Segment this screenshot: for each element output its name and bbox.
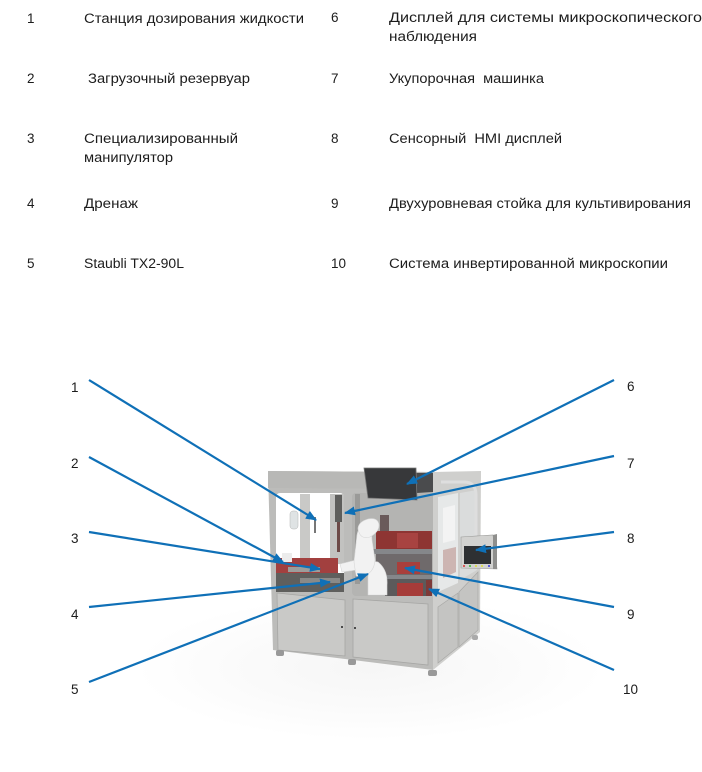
arrow 7 (345, 456, 614, 513)
legend item 8: 8 (331, 131, 339, 146)
legend item 6: наблюдения (389, 29, 477, 44)
legend item 3: 3 (27, 131, 35, 146)
legend item 8: Сенсорный HMI дисплей (389, 131, 562, 146)
arrow 8 (476, 532, 614, 550)
right window (352, 493, 433, 596)
callout numbers: 6 (627, 379, 635, 394)
legend item 10: 10 (331, 256, 346, 271)
callout numbers: 3 (71, 531, 79, 546)
legend item 8 (331, 131, 562, 146)
legend item 3: Специализированный (84, 131, 238, 146)
HMI touch display (461, 534, 497, 569)
legend item 2: Загрузочный резервуар (88, 71, 250, 86)
arrow 4 (89, 582, 330, 607)
callout arrows (89, 380, 614, 682)
legend item 6: Дисплей для системы микроскопического (389, 10, 702, 25)
legend item 1: Станция дозирования жидкости (84, 11, 304, 26)
arrow 2 (89, 457, 283, 562)
right side panel (433, 471, 481, 670)
legend item 3: манипулятор (84, 150, 173, 165)
arrow 5 (89, 574, 368, 682)
legend item 5: 5 (27, 256, 35, 271)
legend item 2 (27, 71, 250, 86)
legend item 10: Система инвертированной микроскопии (389, 256, 668, 271)
arrow 3 (89, 532, 320, 569)
legend item 2: 2 (27, 71, 35, 86)
cabinet doors (277, 593, 345, 656)
callout numbers: 1 (71, 380, 79, 395)
legend item 4 (27, 196, 138, 211)
legend item 4: 4 (27, 196, 35, 211)
callout numbers: 8 (627, 531, 635, 546)
robot arm (340, 519, 387, 595)
legend item 6 (331, 10, 702, 44)
machine illustration (268, 468, 497, 676)
arrow 10 (429, 589, 614, 670)
legend table (27, 10, 702, 271)
legend item 1: 1 (27, 11, 35, 26)
feet (276, 650, 284, 656)
legend item 7: 7 (331, 71, 339, 86)
callout numbers: 4 (71, 607, 79, 622)
arrow 6 (407, 380, 614, 484)
callout numbers: 10 (623, 682, 638, 697)
legend item 5: Staubli TX2-90L (84, 256, 184, 271)
callout numbers (71, 379, 638, 697)
conduit (441, 482, 476, 535)
arrow 9 (405, 568, 614, 607)
legend item 4: Дренаж (84, 196, 138, 211)
microscope monitor (364, 468, 433, 500)
front frame (268, 471, 433, 670)
legend item 9: Двухуровневая стойка для культивирования (389, 196, 691, 211)
callout numbers: 9 (627, 607, 635, 622)
legend item 6: 6 (331, 10, 339, 25)
legend item 7 (331, 71, 545, 86)
callout numbers: 2 (71, 456, 79, 471)
floor shadow (135, 596, 605, 740)
callout numbers: 5 (71, 682, 79, 697)
legend item 5 (27, 256, 184, 271)
legend item 7: Укупорочная машинка (389, 71, 545, 86)
callout numbers: 7 (627, 456, 635, 471)
left window (276, 493, 344, 592)
legend item 9: 9 (331, 196, 339, 211)
legend item 3 (27, 131, 238, 165)
arrow 1 (89, 380, 316, 520)
